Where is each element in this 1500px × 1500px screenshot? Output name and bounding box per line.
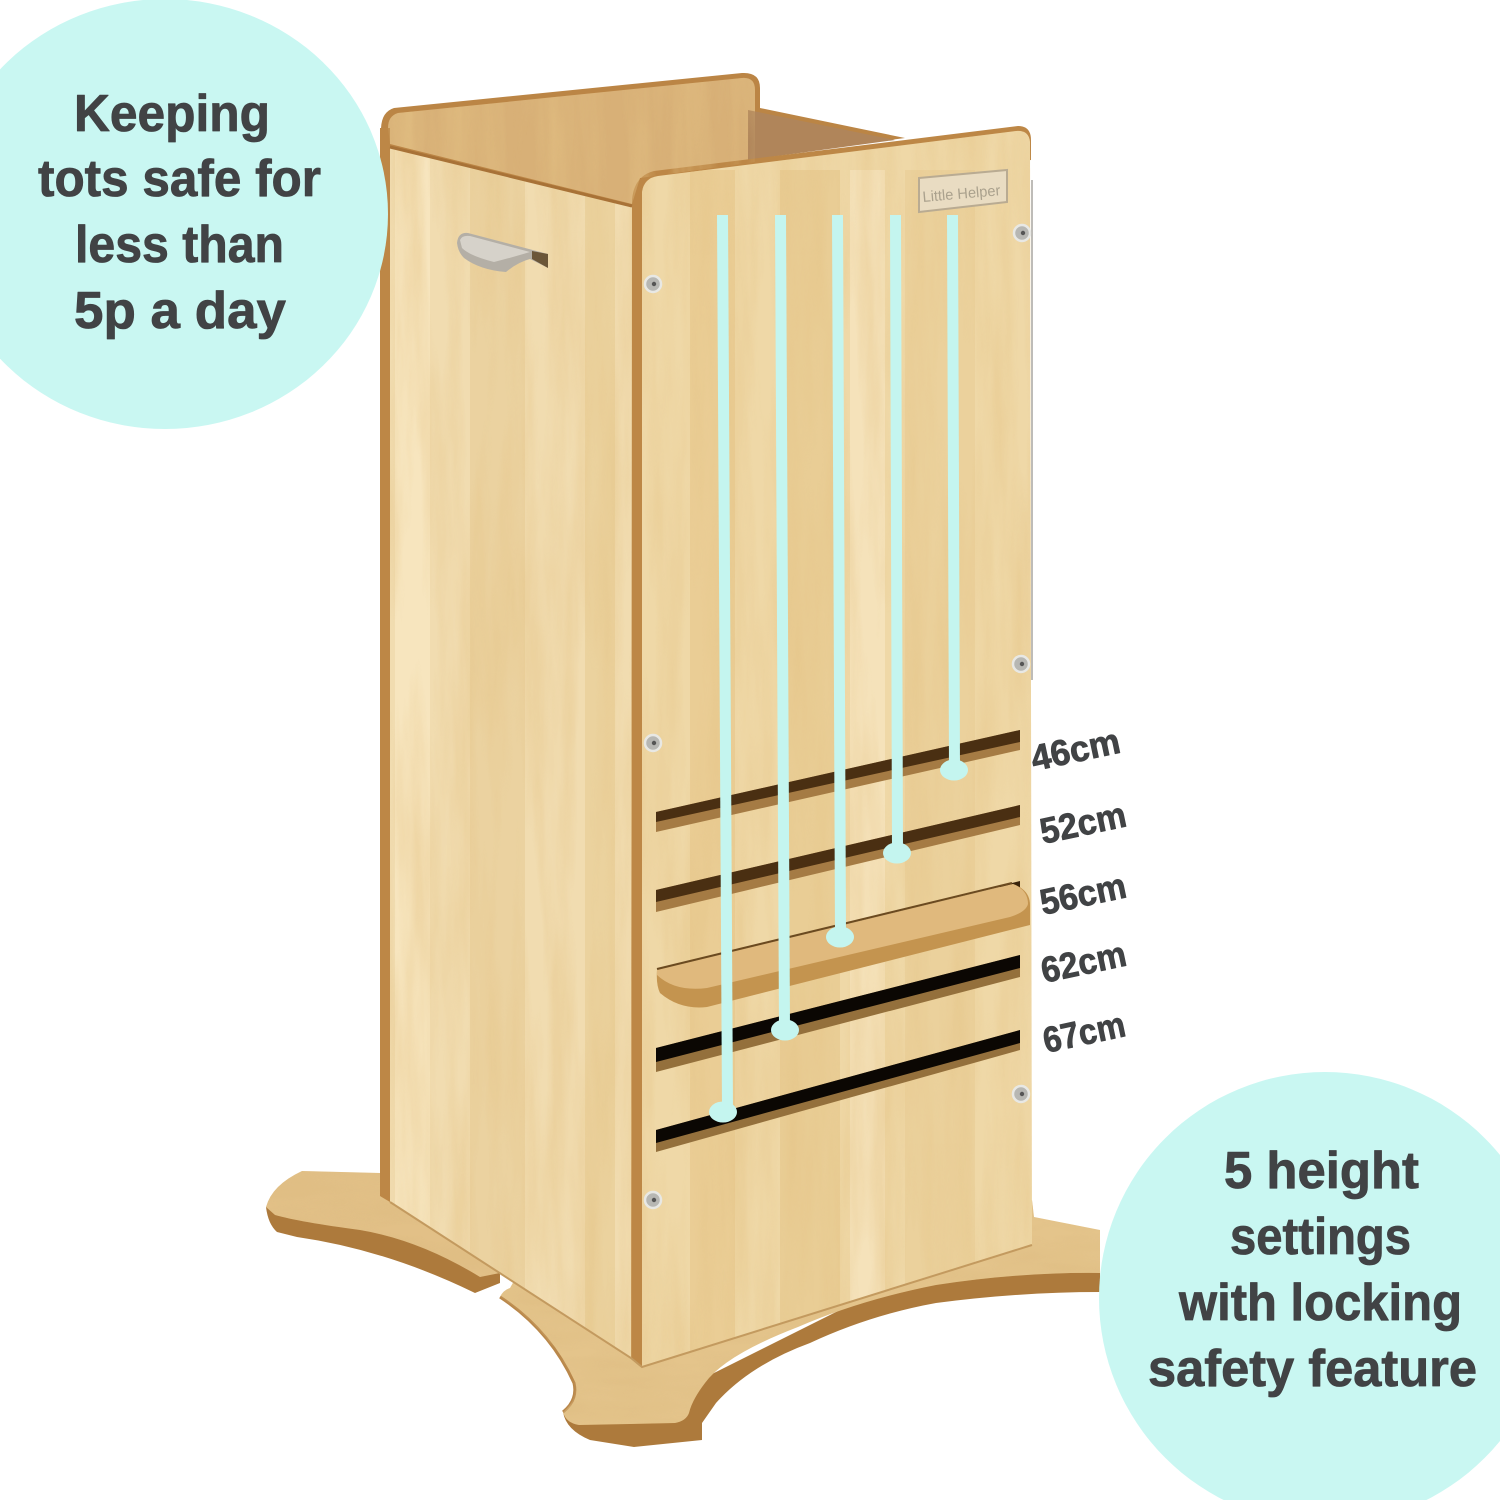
back panel edge	[381, 73, 905, 210]
callout text: 5 height	[1224, 1142, 1419, 1200]
right panel inside	[748, 110, 895, 160]
label: 46cm: 46cm	[1027, 720, 1124, 779]
callout text	[38, 85, 321, 340]
right metal edge	[1031, 180, 1033, 680]
step shelf	[657, 883, 1030, 1007]
brand plate: Little Helper	[922, 182, 1001, 206]
label: 62cm: 62cm	[1037, 933, 1130, 991]
label: 67cm: 67cm	[1039, 1003, 1129, 1061]
callout text: settings	[1230, 1208, 1411, 1266]
wood bands	[395, 140, 615, 1360]
line: 46cm	[940, 215, 968, 780]
handle	[457, 233, 548, 272]
tower base: front foot	[500, 1200, 1100, 1447]
label: 52cm: 52cm	[1036, 794, 1130, 852]
callout text: with locking	[1178, 1274, 1462, 1332]
back panel inside	[388, 78, 755, 204]
left side panel	[390, 148, 632, 1358]
wood grain overlay	[380, 70, 1040, 1370]
callout text: safety feature	[1148, 1340, 1477, 1398]
side panel top edge	[390, 147, 632, 206]
front panel	[642, 131, 1032, 1367]
height slots	[656, 730, 1020, 1152]
line: 52cm	[883, 215, 911, 864]
callout text: less than	[75, 216, 284, 274]
callout text	[1148, 1142, 1477, 1398]
callout text: Keeping	[74, 85, 270, 143]
callout: keeping tots safe	[0, 0, 388, 429]
line: 56cm	[826, 215, 854, 948]
callout text: tots safe for	[38, 150, 321, 208]
tower base: left foot	[266, 1171, 500, 1293]
tower base shadow line	[390, 1202, 1032, 1367]
brand plate	[919, 170, 1007, 212]
line: 67cm	[709, 215, 737, 1122]
feet wood grain	[270, 1181, 1033, 1413]
screws	[645, 225, 1030, 1208]
height labels	[1027, 720, 1130, 1061]
callout text: 5p a day	[74, 282, 286, 340]
callout: 5 height settings	[1099, 1072, 1500, 1500]
line: 62cm	[771, 215, 799, 1040]
height indicator lines	[709, 215, 968, 1122]
label: 56cm: 56cm	[1036, 865, 1130, 923]
product: wooden learning tower	[260, 70, 1110, 1447]
centre edge	[631, 126, 1031, 1367]
left rear edge	[380, 128, 390, 1202]
